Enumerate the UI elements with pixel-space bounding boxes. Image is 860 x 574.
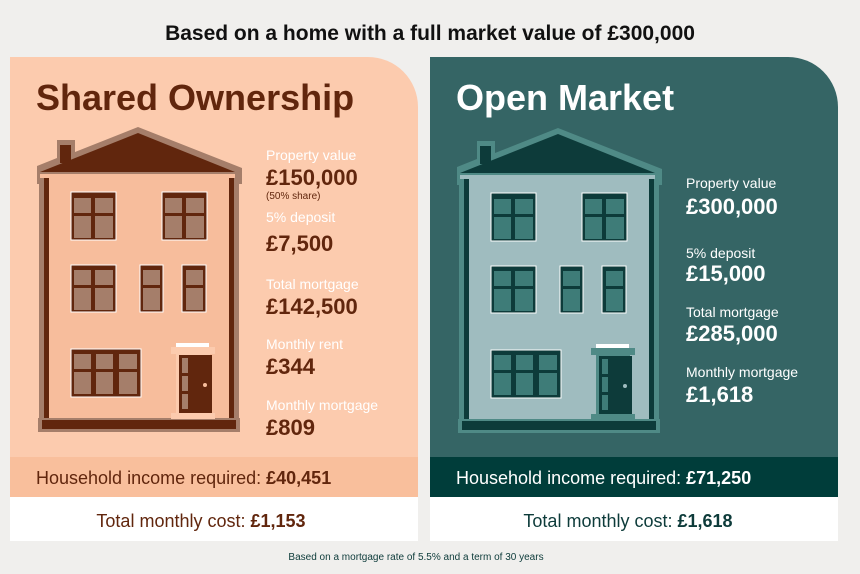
icon: house open market xyxy=(457,128,662,433)
text block: open market figures: £285,000 xyxy=(686,321,778,346)
band: shared monthly cost xyxy=(10,497,418,541)
icon: house shared xyxy=(37,127,242,432)
text block: shared figures: £809 xyxy=(266,415,315,440)
band: open market monthly cost xyxy=(430,497,838,541)
text block: shared figures: Monthly rent xyxy=(266,336,343,352)
text block: open market figures xyxy=(686,175,798,407)
text block: shared figures: £7,500 xyxy=(266,231,333,256)
title: Based on a home with a full market value of £300,000 xyxy=(165,22,695,45)
text block: open market figures: Monthly mortgage xyxy=(686,364,798,380)
band: open market monthly cost: Total monthly cost: £1,618 xyxy=(523,511,733,531)
text block: open market figures: Property value xyxy=(686,175,776,191)
panel: open market xyxy=(430,57,838,457)
band: open market income: Household income required: £71,250 xyxy=(456,468,751,488)
text block: shared figures: £344 xyxy=(266,354,316,379)
heading: open market: Open Market xyxy=(456,77,674,118)
text block: shared figures xyxy=(266,147,378,440)
text block: shared figures: (50% share) xyxy=(266,191,320,202)
text block: open market figures: £300,000 xyxy=(686,194,778,219)
band: shared income xyxy=(10,457,418,497)
text block: shared figures: £150,000 xyxy=(266,165,358,190)
panel: shared ownership xyxy=(10,57,418,457)
band: shared monthly cost: Total monthly cost: £1,153 xyxy=(96,511,306,531)
text block: shared figures: Total mortgage xyxy=(266,276,359,292)
footnote: Based on a mortgage rate of 5.5% and a term of 30 years xyxy=(288,552,544,563)
text block: shared figures: 5% deposit xyxy=(266,209,335,225)
text block: shared figures: Property value xyxy=(266,147,356,163)
text block: open market figures: Total mortgage xyxy=(686,304,779,320)
band: open market income xyxy=(430,457,838,497)
text block: open market figures: £1,618 xyxy=(686,382,753,407)
text block: open market figures: £15,000 xyxy=(686,261,766,286)
heading: shared ownership: Shared Ownership xyxy=(36,77,354,118)
text block: shared figures: Monthly mortgage xyxy=(266,397,378,413)
text block: open market figures: 5% deposit xyxy=(686,245,755,261)
text block: shared figures: £142,500 xyxy=(266,294,358,319)
band: shared income: Household income required: £40,451 xyxy=(36,468,331,488)
